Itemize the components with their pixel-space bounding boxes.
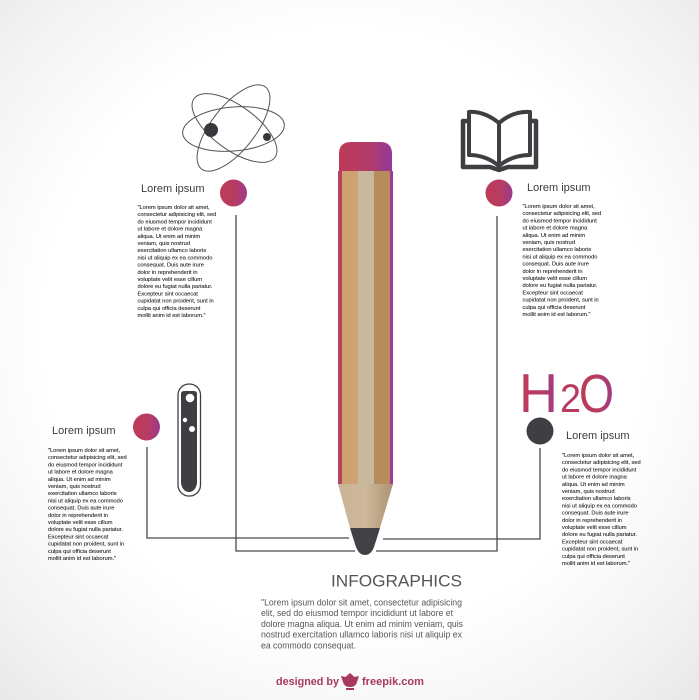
icon: crown: [341, 673, 359, 690]
heading: top left: Lorem ipsum: [141, 183, 205, 195]
text block: top left: consectetur adipisicing elit, sed: [138, 212, 216, 218]
text block: top left: consequat. Duis aute irure: [138, 263, 204, 269]
heading: lower left: Lorem ipsum: [52, 425, 116, 437]
text block: top left: do eiusmod tempor incididunt: [138, 219, 212, 225]
text block: lower left: voluptate velit esse cillum: [48, 520, 113, 526]
title: INFOGRAPHICS: [331, 572, 462, 590]
circle: lower right: [526, 418, 554, 444]
pencil wood tip: [338, 484, 393, 528]
text block: lower right: aliqua. Ut enim ad minim: [562, 482, 625, 488]
text block: top right: do eiusmod tempor incididunt: [522, 218, 597, 224]
text block: lower right: voluptate velit esse cillum: [562, 525, 627, 531]
text block: lower left: mollit anim id est laborum.": [48, 556, 116, 562]
circle: lower left: [133, 414, 160, 440]
footer credit: designed by: [276, 676, 340, 688]
text block: top right: veniam, quis nostrud: [522, 240, 575, 246]
text block: bottom body: elit, sed do eiusmod tempor incididunt ut labore et: [261, 608, 453, 618]
text block: top right: culpa qui officia deserunt: [522, 305, 586, 311]
text block: lower right: "Lorem ipsum dolor sit amet,: [562, 453, 635, 459]
icon: H2O formula: [519, 362, 614, 424]
text block: lower right: do eiusmod tempor incididunt: [562, 467, 637, 473]
text block: lower right: culpa qui officia deserunt: [562, 554, 625, 560]
footer credit: [276, 673, 424, 690]
text block: lower left: ut labore et dolore magna: [48, 470, 114, 476]
text block: bottom body: dolore magna aliqua. Ut enim ad minim veniam, quis: [261, 619, 463, 629]
text block: lower right: dolore eu fugiat nulla pariatur.: [562, 532, 637, 538]
text block: bottom body: ea commodo consequat.: [261, 640, 356, 650]
pencil: [338, 142, 393, 555]
text block: lower left: consectetur adipisicing elit, sed: [48, 455, 127, 461]
text block: top left: culpa qui officia deserunt: [138, 306, 201, 312]
text block: top left: exercitation ullamco laboris: [138, 248, 206, 254]
text block: top right: mollit anim id est laborum.": [522, 312, 591, 318]
text block: lower left: dolore eu fugiat nulla pariatur.: [48, 527, 123, 533]
text block: lower right: veniam, quis nostrud: [562, 489, 614, 495]
text block: top left: dolore eu fugiat nulla pariatur.: [138, 284, 213, 290]
text block: top left: voluptate velit esse cillum: [138, 277, 202, 283]
icon: open book: [463, 112, 536, 170]
text block: lower left: "Lorem ipsum dolor sit amet,: [48, 448, 121, 454]
text block: top right: voluptate velit esse cillum: [522, 276, 587, 282]
text block: top right: aliqua. Ut enim ad minim: [522, 233, 585, 239]
text block: lower right: exercitation ullamco laboris: [562, 496, 631, 502]
footer credit: freepik.com: [362, 676, 424, 688]
text block: top right: consequat. Duis aute irure: [522, 262, 589, 268]
text block: top right: ut labore et dolore magna: [522, 226, 588, 232]
text block: top left: aliqua. Ut enim ad minim: [138, 234, 200, 240]
text block: lower left: veniam, quis nostrud: [48, 484, 100, 490]
circle: top left: [220, 180, 247, 206]
connector lines: [147, 215, 540, 551]
text block: lower left: dolor in reprehenderit in: [48, 513, 108, 519]
text block: lower right: dolor in reprehenderit in: [562, 518, 622, 524]
text block: top right: "Lorem ipsum dolor sit amet,: [522, 204, 595, 210]
text block: lower left: do eiusmod tempor incididunt: [48, 462, 123, 468]
text block: bottom body: [261, 598, 463, 650]
text block: top left: cupidatat non proident, sunt in: [138, 299, 214, 305]
text block: top right: exercitation ullamco laboris: [522, 247, 591, 253]
pencil body: [338, 171, 393, 484]
text block: lower left: Excepteur sint occaecat: [48, 534, 109, 540]
text block: top left: mollit anim id est laborum.": [138, 313, 206, 319]
text block: lower right: consequat. Duis aute irure: [562, 511, 628, 517]
text block: top right: dolore eu fugiat nulla pariatur.: [522, 283, 598, 289]
text block: top right: cupidatat non proident, sunt in: [522, 298, 599, 304]
text block: lower left: aliqua. Ut enim ad minim: [48, 477, 111, 483]
text block: lower left: consequat. Duis aute irure: [48, 506, 114, 512]
circle: top right: [486, 180, 512, 206]
text block: top left: dolor in reprehenderit in: [138, 270, 198, 276]
text block: top right: Excepteur sint occaecat: [522, 290, 583, 296]
icon: H2O formula: O: [579, 364, 614, 424]
pencil eraser: [339, 142, 392, 171]
icon: H2O formula: 2: [560, 377, 581, 421]
text block: top right: consectetur adipisicing elit, sed: [522, 211, 601, 217]
text block: top left: Excepteur sint occaecat: [138, 291, 198, 297]
text block: bottom body: "Lorem ipsum dolor sit amet, consectetur adipisicing: [261, 598, 462, 608]
heading: lower right: Lorem ipsum: [566, 430, 630, 442]
text block: top left: ut labore et dolore magna: [138, 227, 203, 233]
text block: top left: "Lorem ipsum dolor sit amet,: [138, 205, 210, 211]
icon: H2O formula: H: [519, 362, 558, 424]
text block: top right: nisi ut aliquip ex ea commodo: [522, 254, 597, 260]
text block: top left: veniam, quis nostrud: [138, 241, 190, 247]
text block: lower right: Excepteur sint occaecat: [562, 539, 623, 545]
icon: atom: [181, 73, 288, 183]
heading: top right: Lorem ipsum: [527, 182, 591, 194]
text block: lower left: cupidatat non proident, sunt in: [48, 542, 124, 548]
text block: lower left: culpa qui officia deserunt: [48, 549, 111, 555]
pencil lead: [350, 528, 380, 555]
text block: lower left: exercitation ullamco laboris: [48, 491, 117, 497]
text block: lower right: mollit anim id est laborum.": [562, 561, 630, 567]
text block: lower right: cupidatat non proident, sunt in: [562, 547, 638, 553]
text block: lower right: consectetur adipisicing elit, sed: [562, 460, 641, 466]
text block: lower right: ut labore et dolore magna: [562, 475, 628, 481]
icon: test tube: [178, 384, 200, 496]
text block: bottom body: nostrud exercitation ullamco laboris nisi ut aliquip ex: [261, 630, 462, 640]
text block: lower right: nisi ut aliquip ex ea commodo: [562, 503, 637, 509]
text block: top right: dolor in reprehenderit in: [522, 269, 583, 275]
text block: top left: nisi ut aliquip ex ea commodo: [138, 255, 212, 261]
text block: lower left: nisi ut aliquip ex ea commodo: [48, 498, 123, 504]
